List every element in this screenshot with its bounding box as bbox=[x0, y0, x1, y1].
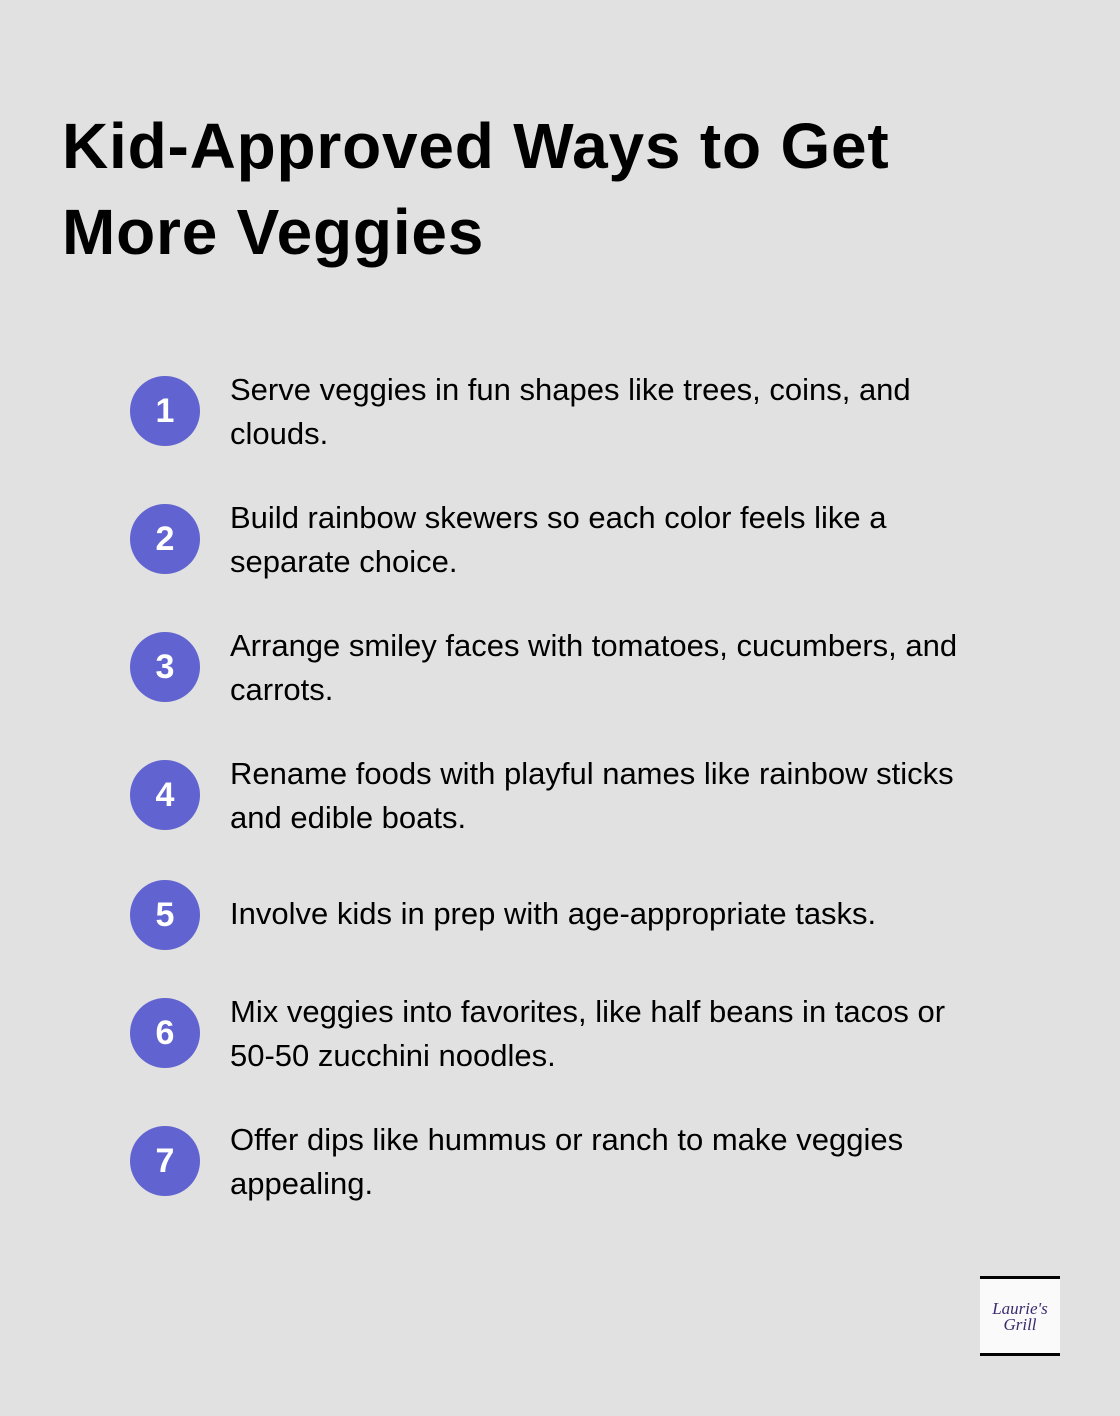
item 1: Serve veggies in fun shapes like trees, coins, and bbox=[230, 372, 911, 407]
item 1: 1 bbox=[156, 392, 174, 430]
item 3: carrots. bbox=[230, 672, 333, 707]
item 6: 6 bbox=[156, 1014, 174, 1052]
item 1: clouds. bbox=[230, 416, 328, 451]
item 2 bbox=[130, 500, 886, 579]
item 6: Mix veggies into favorites, like half beans in tacos or bbox=[230, 994, 945, 1029]
title bbox=[62, 110, 890, 268]
item 1 bbox=[130, 372, 911, 451]
logo bbox=[980, 1276, 1060, 1356]
item 5: Involve kids in prep with age-appropriate tasks. bbox=[230, 896, 876, 931]
item 7: 7 bbox=[156, 1142, 174, 1180]
item 6: 50-50 zucchini noodles. bbox=[230, 1038, 556, 1073]
item 4: 4 bbox=[156, 776, 174, 814]
item 7: Offer dips like hummus or ranch to make veggies bbox=[230, 1122, 903, 1157]
item 5 bbox=[130, 880, 876, 950]
item 2: Build rainbow skewers so each color feels like a bbox=[230, 500, 886, 535]
item 4: Rename foods with playful names like rainbow sticks bbox=[230, 756, 954, 791]
item 7: appealing. bbox=[230, 1166, 373, 1201]
item 4 bbox=[130, 756, 954, 835]
item 6 bbox=[130, 994, 945, 1073]
item 3 bbox=[130, 628, 957, 707]
item 7 bbox=[130, 1122, 903, 1201]
item 5: 5 bbox=[156, 896, 174, 934]
item 4: and edible boats. bbox=[230, 800, 466, 835]
title: Kid-Approved Ways to Get bbox=[62, 110, 890, 182]
logo: Grill bbox=[1003, 1315, 1037, 1334]
logo: Laurie's bbox=[992, 1299, 1048, 1318]
title: More Veggies bbox=[62, 196, 484, 268]
item 2: 2 bbox=[156, 520, 174, 558]
item 2: separate choice. bbox=[230, 544, 457, 579]
item 3: 3 bbox=[156, 648, 174, 686]
item 3: Arrange smiley faces with tomatoes, cucumbers, and bbox=[230, 628, 957, 663]
